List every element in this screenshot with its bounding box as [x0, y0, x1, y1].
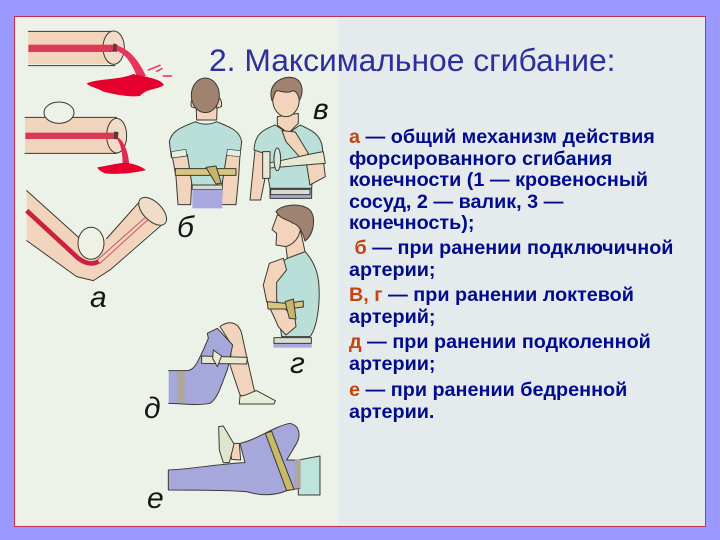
- illustration: lying leg with strap (е): [168, 423, 320, 495]
- item е: артерии.: [349, 401, 434, 423]
- text block: legend descriptions: [349, 126, 673, 423]
- label г: г: [290, 347, 305, 380]
- illustration: bent limb with roller (а): [27, 191, 172, 281]
- item а: сосуд, 2 — валик, 3 —: [349, 191, 563, 213]
- item б: артерии;: [349, 259, 436, 281]
- item д: артерии;: [349, 353, 436, 375]
- item д: д — при ранении подколенной: [349, 331, 651, 353]
- illustration: man in profile with strap (г): [263, 205, 319, 348]
- item а: [349, 126, 655, 234]
- label е: е: [147, 482, 164, 515]
- label в: в: [313, 93, 329, 126]
- title: 2. Максимальное сгибание:: [209, 42, 616, 78]
- item а: форсированного сгибания: [349, 148, 612, 170]
- item в, г: артерий;: [349, 306, 436, 328]
- item в, г: В, г — при ранении локтевой: [349, 284, 634, 306]
- label д: д: [144, 392, 161, 425]
- illustration: cut limb with heavy bleeding: [28, 31, 171, 96]
- illustration: seated leg with knee flexed (д): [169, 323, 275, 405]
- item а: конечность);: [349, 212, 474, 234]
- illustration: limb with roller: [25, 102, 146, 174]
- item а: а — общий механизм действия: [349, 126, 655, 148]
- item е: [349, 379, 627, 423]
- label а: а: [90, 281, 107, 314]
- illustration: man from front with sling (в): [250, 77, 325, 200]
- item а: конечности (1 — кровеносный: [349, 169, 648, 191]
- item в, г: [349, 284, 634, 328]
- illustration: man from back with belt (б): [169, 78, 242, 208]
- item е: е — при ранении бедренной: [349, 379, 627, 401]
- item б: б — при ранении подключичной: [354, 237, 673, 259]
- item б: [349, 237, 673, 281]
- label б: б: [177, 211, 195, 244]
- item д: [349, 331, 651, 375]
